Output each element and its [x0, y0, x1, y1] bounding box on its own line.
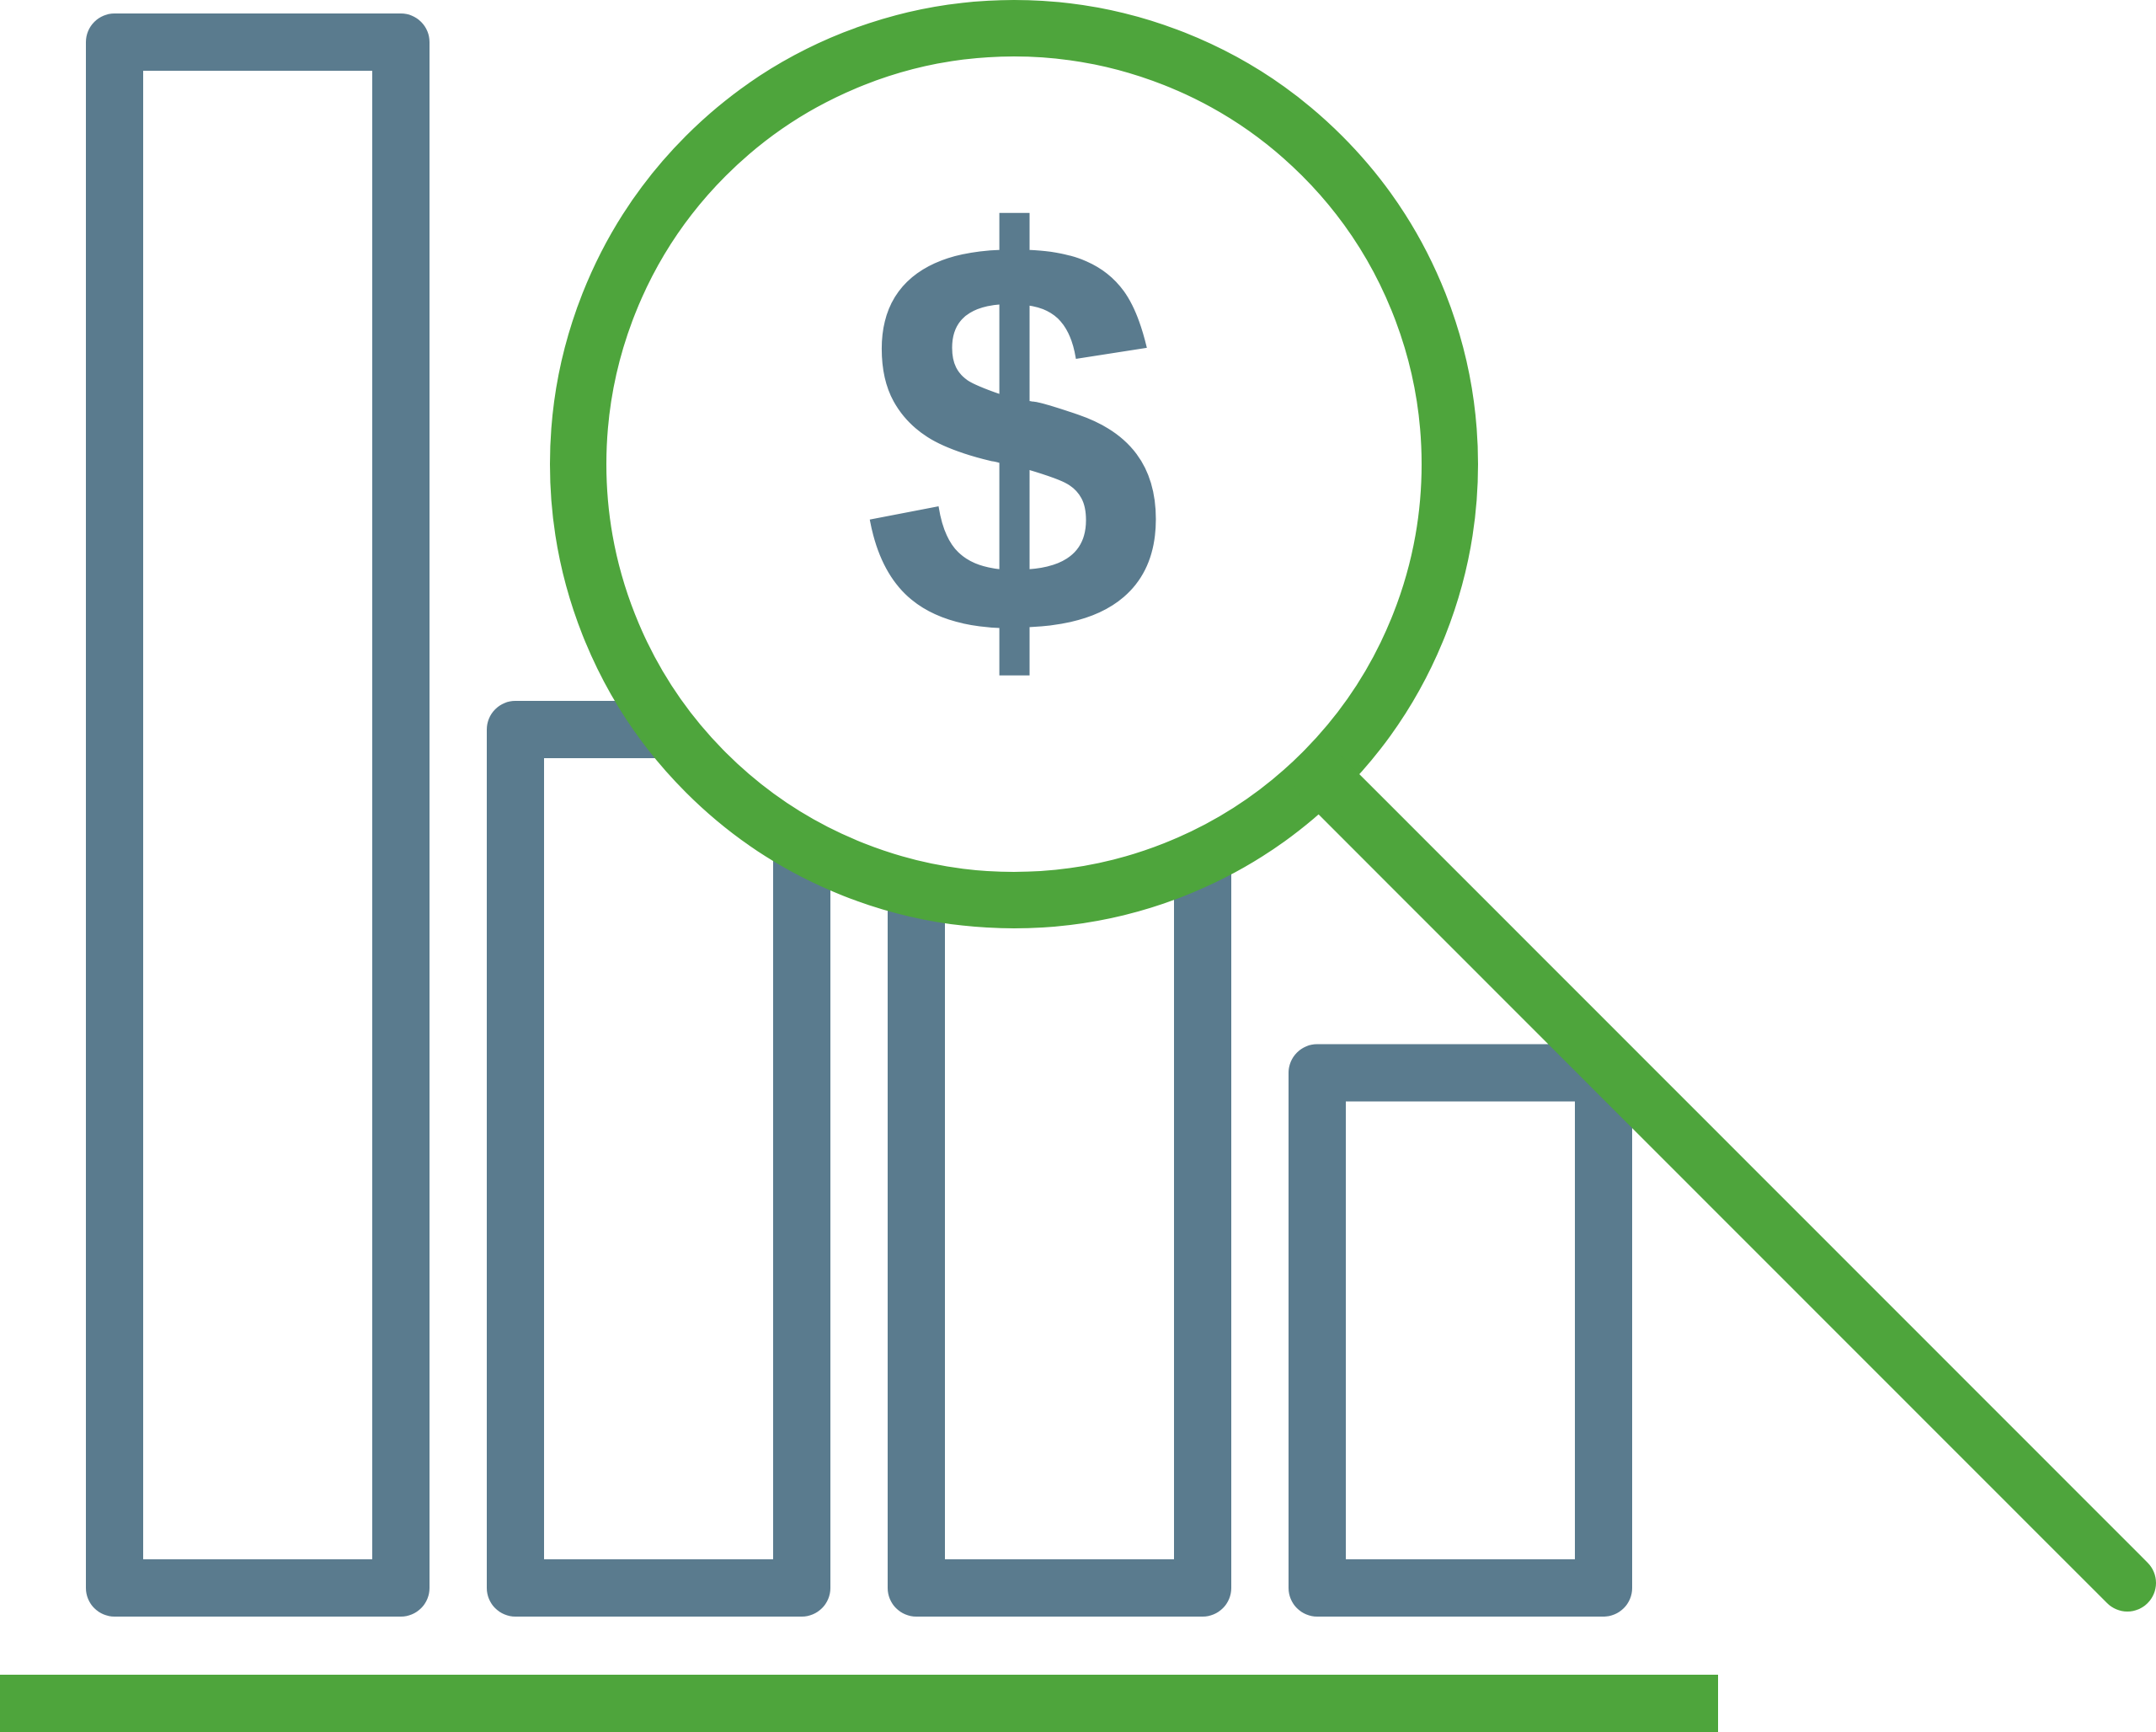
dollar sign: $ [863, 122, 1163, 752]
bar chart [115, 42, 1604, 1588]
handle [1322, 778, 2127, 1583]
bar 2 [515, 730, 802, 1588]
baseline axis [0, 1675, 1718, 1732]
bar 1 [115, 42, 401, 1588]
lens [578, 29, 1450, 900]
bar 3 [916, 730, 1203, 1588]
bar 4 [1317, 1073, 1604, 1588]
icon: magnifying glass [578, 29, 2127, 1583]
